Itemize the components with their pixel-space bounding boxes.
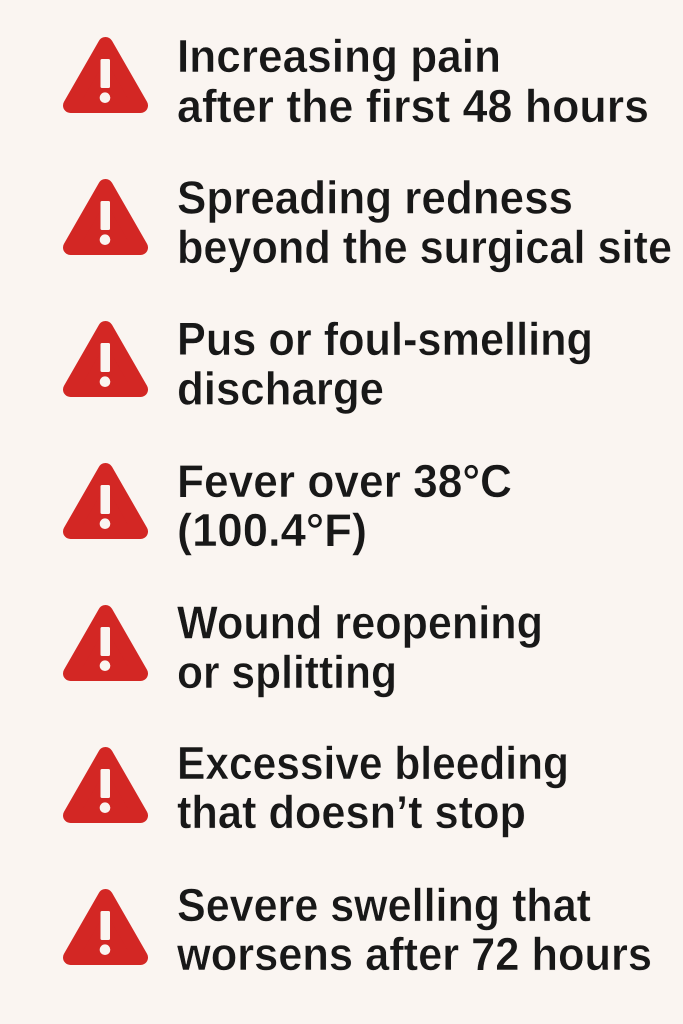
item text: that doesn’t stop	[177, 786, 526, 838]
item text: discharge	[177, 362, 384, 414]
item: wound reopening	[70, 596, 543, 698]
icon: warning triangle	[70, 470, 140, 532]
item: severe swelling	[70, 879, 652, 980]
item text: Pus or foul-smelling	[177, 313, 593, 365]
icon: warning triangle	[70, 186, 140, 248]
icon: warning triangle	[70, 896, 140, 958]
icon: warning triangle	[70, 612, 140, 674]
item text: (100.4°F)	[177, 504, 367, 556]
item text	[177, 30, 649, 132]
item text: worsens after 72 hours	[176, 928, 652, 980]
item: spreading redness	[70, 172, 672, 273]
icon: warning triangle	[70, 328, 140, 390]
item text	[177, 172, 672, 273]
item text: Wound reopening	[177, 596, 543, 648]
item text	[177, 313, 593, 414]
icon: warning triangle	[70, 44, 140, 106]
item text: Excessive bleeding	[177, 737, 569, 789]
item: increasing pain	[70, 30, 649, 132]
item text	[176, 879, 652, 980]
item text	[177, 455, 512, 556]
item text: or splitting	[177, 646, 397, 698]
item: fever	[70, 455, 512, 556]
item text	[177, 596, 543, 698]
item: excessive bleeding	[70, 737, 569, 838]
icon: warning triangle	[70, 754, 140, 816]
item text	[177, 737, 569, 838]
item text: Spreading redness	[177, 172, 573, 224]
item text: Increasing pain	[177, 30, 501, 82]
item text: after the first 48 hours	[177, 80, 649, 132]
item: pus or discharge	[70, 313, 593, 414]
item text: Fever over 38°C	[177, 455, 512, 507]
item text: Severe swelling that	[177, 879, 591, 931]
